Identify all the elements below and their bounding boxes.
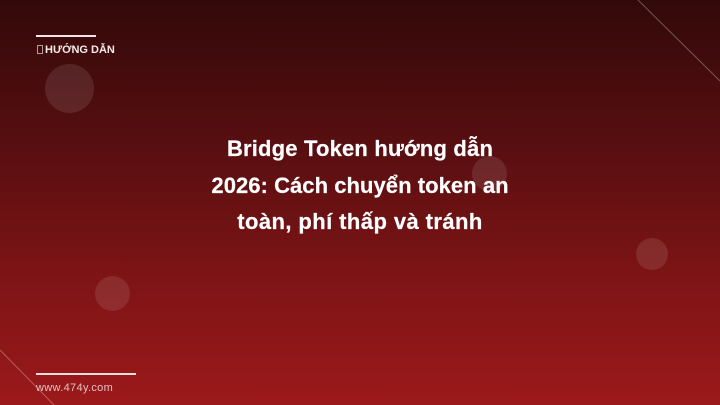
top accent bar bbox=[36, 35, 96, 37]
title bbox=[211, 136, 509, 234]
website url: www.474y.com bbox=[36, 382, 113, 394]
decorative circle: lower left bbox=[95, 276, 130, 311]
decorative circle: centre right bbox=[472, 156, 507, 191]
bottom accent bar bbox=[36, 373, 136, 374]
icon: missing glyph box bbox=[37, 45, 43, 54]
category label: HƯỚNG DẪN bbox=[45, 44, 115, 56]
title: 2026: Cách chuyển token an bbox=[211, 172, 509, 198]
title: toàn, phí thấp và tránh bbox=[237, 209, 483, 234]
decorative circle: right bbox=[636, 238, 668, 270]
title: Bridge Token hướng dẫn bbox=[227, 136, 493, 161]
decorative circle: top left bbox=[45, 64, 94, 113]
